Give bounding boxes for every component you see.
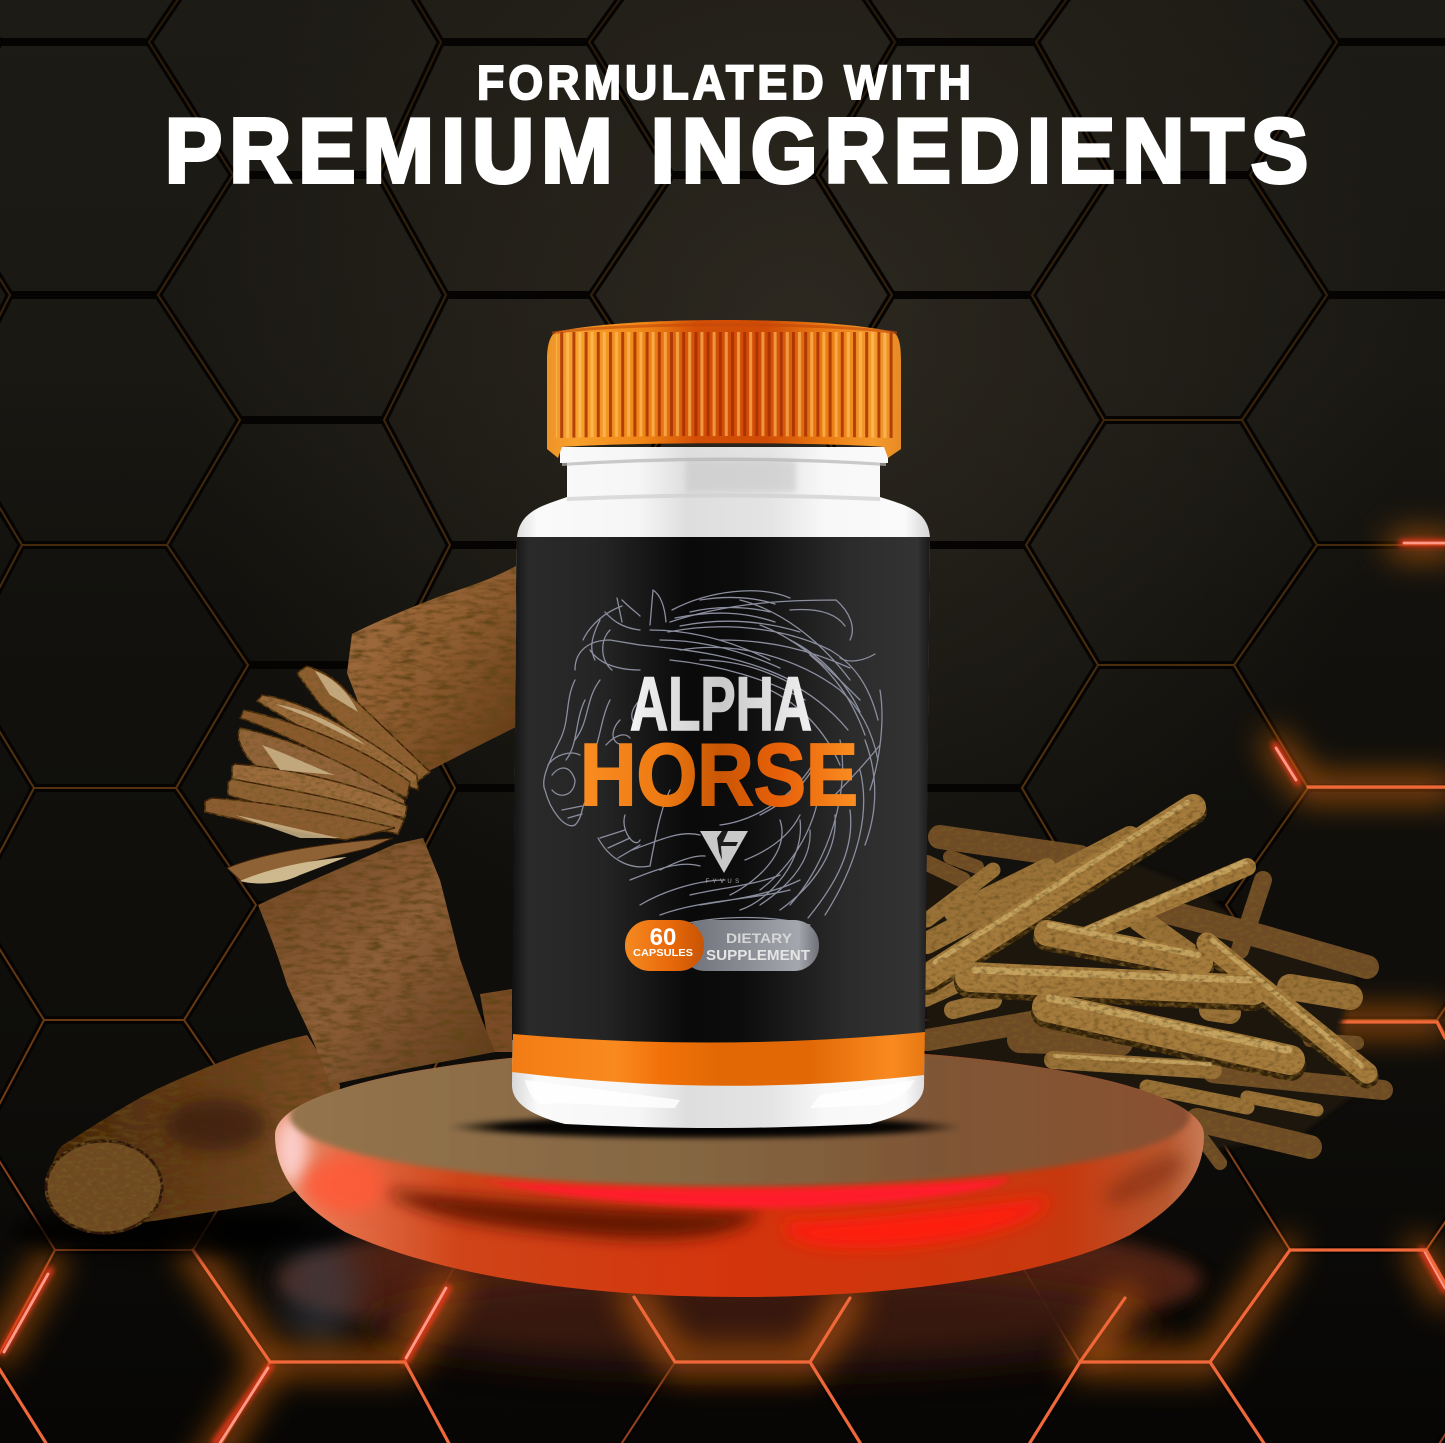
right dark rim xyxy=(1102,1150,1189,1210)
product name xyxy=(580,662,858,824)
mid sticks xyxy=(925,837,1350,1110)
platform reflection on floor xyxy=(278,1212,1202,1375)
supplement line: SUPPLEMENT xyxy=(706,948,810,964)
platform side xyxy=(275,1047,1204,1297)
base highlights xyxy=(525,1080,915,1108)
main sticks xyxy=(927,807,1367,1073)
display platform xyxy=(275,1045,1204,1297)
cap xyxy=(547,320,901,458)
ALPHA wordmark: ALPHA xyxy=(630,662,812,747)
brand logo: FYVUS xyxy=(705,879,743,885)
bottle contact shadow xyxy=(447,1115,963,1139)
capsules caption: CAPSULES xyxy=(633,947,693,959)
orange band xyxy=(512,1032,925,1086)
floor shadow under roots xyxy=(10,1210,350,1254)
bottle body xyxy=(512,447,930,1128)
capsule count: 60 xyxy=(650,924,676,951)
pale left highlight xyxy=(276,1116,308,1184)
HORSE wordmark: HORSE xyxy=(580,725,858,824)
heading line 1: FORMULATED WITH xyxy=(477,56,971,109)
pale slice faces xyxy=(235,671,365,838)
stick shadows xyxy=(927,811,1367,1077)
ingredient: cassava root slices and logs (left) xyxy=(46,566,516,1233)
neck groove xyxy=(562,458,886,466)
top surface xyxy=(290,1045,1190,1187)
horse line art xyxy=(544,590,882,925)
red highlight lower xyxy=(784,1198,1050,1248)
neck highlight band xyxy=(686,460,796,492)
red highlight upper xyxy=(480,1178,1007,1208)
long root lying on floor xyxy=(47,1035,340,1230)
root cut face xyxy=(46,1141,162,1233)
top slice on log xyxy=(227,838,393,883)
rear sticks xyxy=(927,837,1383,1163)
dark band xyxy=(385,1190,760,1239)
upper log xyxy=(347,566,516,772)
root stub behind bottle xyxy=(480,989,512,1052)
fanned slices xyxy=(205,666,430,840)
platform shading clipped to rim xyxy=(276,1045,1191,1248)
capsule badge xyxy=(625,920,819,971)
shadow mass behind the pile xyxy=(925,850,1360,1150)
heading xyxy=(165,56,1308,202)
highlights xyxy=(935,802,1362,1066)
shoulder groove xyxy=(567,494,880,501)
dark patch on long root xyxy=(165,1099,265,1151)
black label xyxy=(512,537,930,1048)
brand logo xyxy=(700,831,748,885)
heading line 2: PREMIUM INGREDIENTS xyxy=(165,100,1308,202)
neon glow segments on hexagon edges xyxy=(0,543,1445,1443)
salmon patch xyxy=(303,1157,387,1213)
dietary line: DIETARY xyxy=(726,930,793,946)
product bottle xyxy=(512,320,930,1128)
lower log xyxy=(258,838,495,1085)
ingredient: ashwagandha root sticks (right) xyxy=(925,802,1383,1163)
